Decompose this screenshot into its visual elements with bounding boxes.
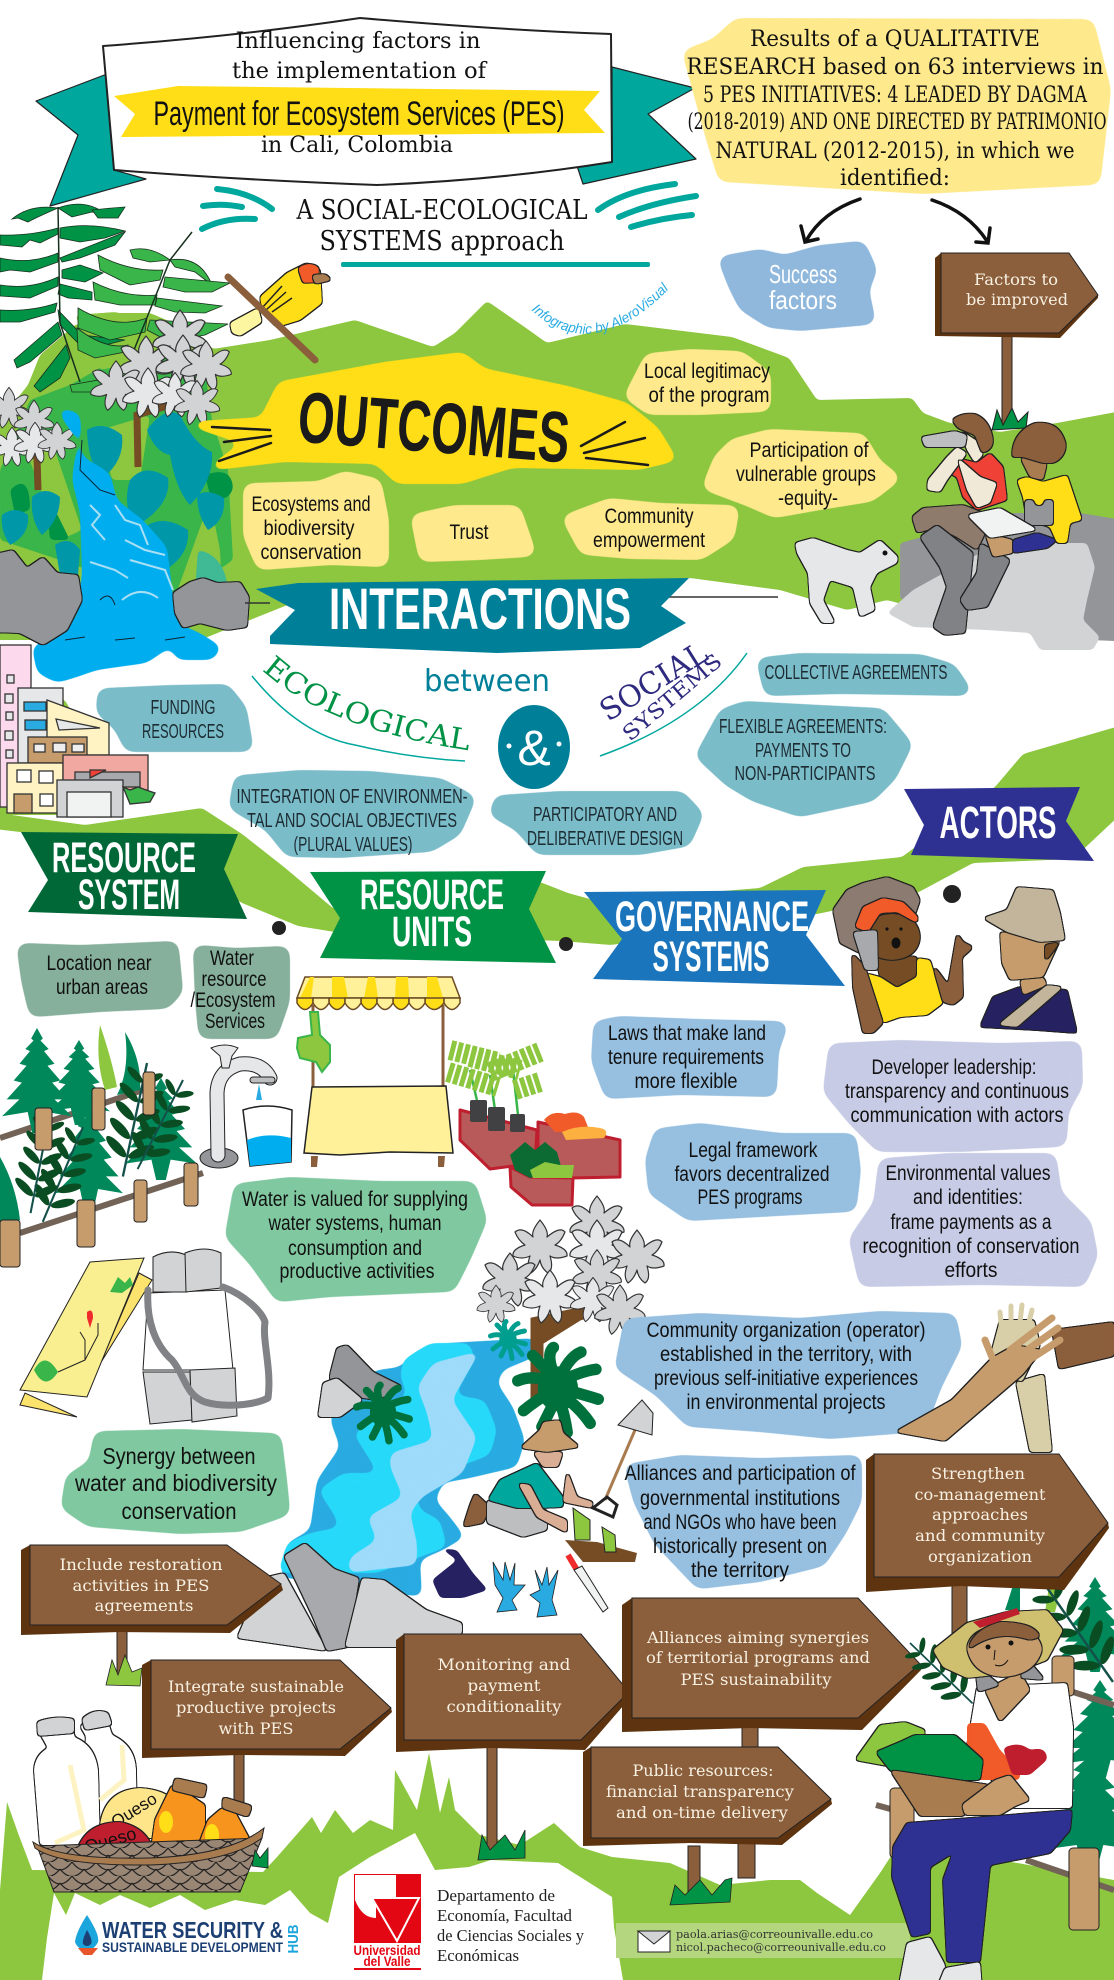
gardener planting (432, 1400, 653, 1617)
sign: include restoration: agreements (94, 1596, 194, 1615)
title text: Payment for Ecosystem Services (PES) (154, 95, 564, 133)
interactions banner: INTERACTIONS (329, 577, 631, 642)
woman on phone (833, 877, 973, 1033)
banner: resource system (21, 832, 247, 919)
banner: resource units (310, 871, 556, 963)
burst lines (212, 422, 648, 465)
hat and face (933, 1608, 1063, 1692)
ampersand badge (498, 705, 570, 789)
research results callout: Results of a QUALITATIVE (750, 27, 1040, 52)
sign: include restoration (21, 1545, 283, 1675)
cheese: Queso (108, 1789, 160, 1832)
interaction: funding resources (103, 691, 246, 745)
success factors tag: Success (769, 259, 837, 289)
outcome: local legitimacy: of the program (648, 384, 770, 407)
title text: the implementation of (232, 59, 488, 84)
sign: factors to be improved: be improved (966, 290, 1068, 309)
interaction: integration of objectives: TAL AND SOCIAL OBJECTIVES (247, 810, 457, 832)
sign: integrate sustainable: with PES (218, 1719, 294, 1738)
subtitle: SYSTEMS approach (320, 226, 564, 257)
outcomes heading: OUTCOMES (295, 378, 573, 479)
interaction: funding resources: FUNDING (150, 697, 216, 719)
resource units: synergy: conservation (122, 1498, 236, 1524)
outcome: participation (710, 436, 892, 511)
seedlings (565, 1508, 637, 1562)
gloves (493, 1562, 558, 1617)
white blossoms (0, 310, 231, 466)
gardener (463, 1420, 593, 1537)
universidad del valle logo: del Valle (364, 1953, 411, 1969)
red cheese (76, 1822, 155, 1857)
actors: developer leadership (830, 1047, 1076, 1145)
pins (272, 885, 961, 951)
water security hub logo (75, 1915, 302, 1955)
sign: include restoration: activities in PES (72, 1576, 210, 1595)
banner: resource system: SYSTEM (78, 871, 180, 919)
water security hub logo: HUB (285, 1924, 302, 1954)
resource units: water valued: consumption and (288, 1237, 422, 1260)
resource system: location: urban areas (56, 976, 148, 999)
outcome: community empowerment: Community (604, 505, 694, 528)
community blob: in environmental projects (686, 1391, 886, 1414)
resource units: water valued: Water is valued for supplying (242, 1188, 468, 1211)
outcome: ecosystems: Ecosystems and (252, 493, 370, 516)
between: between (424, 664, 550, 699)
subtitle: A SOCIAL-ECOLOGICAL (296, 195, 588, 226)
sign: factors to be improved: Factors to (974, 270, 1058, 289)
resource system: water resource (190, 947, 283, 1033)
title text: Influencing factors in (236, 29, 480, 54)
awning (297, 977, 460, 998)
binoculars (143, 1249, 269, 1424)
yellow bird on branch (228, 263, 332, 360)
success factors tag: factors (769, 285, 837, 315)
banner: resource system: RESOURCE (52, 834, 196, 882)
resource system: water resource: resource (202, 968, 266, 991)
outcome: community empowerment: empowerment (593, 529, 705, 552)
interaction: integration of objectives (236, 777, 468, 856)
research results callout (686, 25, 1106, 191)
lower rocks (237, 1543, 462, 1651)
actors: environmental values: efforts (944, 1259, 998, 1282)
department text: Economía, Facultad (437, 1906, 572, 1925)
ecological and social heading (252, 635, 748, 789)
table (304, 1086, 453, 1155)
contact emails: nicol.pacheco@correounivalle.edu.co (676, 1940, 886, 1954)
sign: monitoring: conditionality (446, 1697, 562, 1716)
heart leaves (2, 412, 224, 575)
department text: de Ciencias Sociales y (437, 1926, 584, 1945)
sign: alliances aiming synergies (622, 1598, 921, 1750)
governance: legal framework: PES programs (698, 1186, 802, 1209)
department text: Departamento de (437, 1886, 555, 1905)
lamb (795, 538, 898, 623)
crates (460, 1110, 620, 1178)
teal accent strokes (202, 184, 696, 229)
credit: Infographic by AleroVisual (532, 282, 668, 334)
actors: environmental values (856, 1160, 1091, 1282)
boy with binoculars (912, 414, 1010, 635)
sign: monitoring: payment (468, 1676, 541, 1695)
honey jars (150, 1778, 252, 1857)
outcome: participation: -equity- (778, 487, 838, 510)
icon: envelope (638, 1931, 670, 1952)
title ribbon (36, 18, 696, 206)
shoes (898, 1937, 945, 1980)
trousers (892, 1810, 1072, 1962)
sign: strengthen co-management (866, 1454, 1109, 1638)
bottom grass ground (0, 1753, 1114, 1980)
governance: laws: more flexible (634, 1070, 738, 1093)
resource system: water resource: Services (205, 1010, 265, 1033)
water security hub logo: WATER SECURITY & (102, 1917, 283, 1943)
sign: integrate sustainable: Integrate sustainable (168, 1677, 344, 1696)
department text: Económicas (437, 1946, 519, 1965)
sign: alliances aiming synergies: PES sustainability (680, 1670, 832, 1689)
interaction: flexible agreements: NON-PARTICIPANTS (734, 763, 876, 785)
universidad del valle logo: Universidad (354, 1942, 420, 1958)
upper rocks (318, 1345, 403, 1417)
paper bag (890, 1770, 990, 1816)
produce (855, 1722, 1047, 1816)
interaction: flexible agreements (703, 708, 905, 810)
sign: monitoring: Monitoring and (438, 1655, 570, 1674)
department text (437, 1886, 584, 1965)
banner: governance systems: GOVERNANCE (615, 893, 809, 941)
lime hills background (0, 301, 1114, 945)
actors: environmental values: Environmental values (886, 1162, 1050, 1185)
interactions banner (245, 577, 778, 653)
interaction: collective agreements: COLLECTIVE AGREEMENTS (764, 662, 948, 684)
interaction: flexible agreements: FLEXIBLE AGREEMENTS: (719, 716, 887, 738)
interaction: participatory design: PARTICIPATORY AND (533, 804, 677, 826)
title box (103, 18, 612, 185)
contact emails: paola.arias@correounivalle.edu.co (676, 1927, 873, 1941)
flowering tree (537, 1310, 588, 1400)
farmer plants behind (896, 1560, 1114, 1870)
banner: governance systems: SYSTEMS (652, 933, 770, 981)
ecological and social heading: SYSTEMS (618, 649, 727, 746)
leafy branches (7, 1057, 204, 1231)
interaction: participatory design (497, 798, 696, 850)
conifers (0, 1025, 197, 1225)
machete (568, 1555, 608, 1612)
water tap and glass (200, 1045, 292, 1168)
sign: alliances aiming synergies: of territorial programs and (646, 1648, 870, 1667)
alliances blob: Alliances and participation of (624, 1462, 856, 1485)
subtitle (202, 184, 696, 267)
man in hat (980, 887, 1077, 1033)
resource system: water resource: /Ecosystem (190, 989, 276, 1012)
sign: strengthen co-management: co-management (914, 1485, 1046, 1504)
interaction: collective agreements (764, 660, 963, 689)
sign: public resources: and on-time delivery (616, 1803, 788, 1822)
ribbon tails (36, 67, 696, 206)
banner: resource units: UNITS (392, 908, 472, 956)
hand (962, 1775, 1030, 1815)
children on rock (887, 414, 1114, 650)
actors: developer leadership: communication with actors (850, 1104, 1064, 1127)
resource system: location: Location near (46, 952, 152, 975)
governance: legal framework (652, 1130, 854, 1214)
farmer with vegetables (855, 1608, 1114, 1980)
sign: strengthen co-management: and community (915, 1526, 1045, 1545)
community blob: established in the territory, with (660, 1343, 912, 1366)
sign: strengthen co-management: approaches (932, 1505, 1028, 1524)
alliances blob (624, 1462, 856, 1582)
grass tuft (670, 1878, 732, 1905)
sign: alliances aiming synergies: Alliances aiming synergies (646, 1628, 869, 1647)
saplings (448, 1050, 540, 1115)
universidad del valle logo (354, 1874, 421, 1970)
title text: in Cali, Colombia (261, 133, 453, 158)
sign: public resources: financial transparency (606, 1782, 794, 1801)
outcome: local legitimacy (632, 356, 770, 408)
community blob (622, 1318, 955, 1432)
resource system: water resource: Water (210, 947, 254, 970)
shirt (967, 1683, 1073, 1808)
sign: integrate sustainable (142, 1660, 392, 1807)
map (20, 1258, 152, 1417)
monstera leaves (357, 1347, 598, 1441)
milk bottles (34, 1711, 137, 1845)
grey rocks (0, 550, 249, 645)
mid-green undergrowth (0, 312, 233, 600)
clasped hands (895, 1305, 1114, 1452)
sign: monitoring (396, 1634, 630, 1857)
social systems: SOCIAL (594, 635, 714, 729)
yellow PES banner (114, 86, 605, 137)
ecological: ECOLOGICAL (263, 654, 469, 750)
alliances blob: governmental institutions (640, 1487, 840, 1510)
banner: governance systems (584, 890, 845, 986)
community blob: previous self-initiative experiences (654, 1367, 918, 1390)
research results callout: RESEARCH based on 63 interviews in (686, 55, 1104, 80)
research results callout: NATURAL (2012-2015), in which we (716, 139, 1074, 164)
outcome: participation: Participation of (750, 439, 869, 462)
governance: legal framework: favors decentralized (674, 1163, 830, 1186)
banner: resource units: RESOURCE (360, 871, 504, 919)
trash bag (432, 1548, 488, 1598)
waterfall (32, 407, 222, 683)
fence and trees (0, 1025, 204, 1267)
outcome: trust: Trust (450, 521, 489, 544)
fence behind farmer (876, 1656, 1114, 1930)
trunks (17, 405, 170, 490)
sign: public resources: Public resources: (632, 1761, 774, 1780)
interaction: flexible agreements: PAYMENTS TO (755, 740, 851, 762)
outcome: ecosystems: conservation (260, 541, 362, 564)
resource units: synergy: water and biodiversity (74, 1470, 277, 1496)
governance: legal framework: Legal framework (688, 1139, 818, 1162)
fern frond light (70, 249, 230, 392)
actors: developer leadership: transparency and continuous (845, 1080, 1069, 1103)
sign: strengthen co-management: Strengthen (931, 1464, 1025, 1483)
actors: environmental values: recognition of conservation (862, 1235, 1080, 1258)
research results callout: identified: (840, 166, 950, 191)
outcome: community empowerment (570, 505, 732, 553)
rock (887, 513, 1114, 650)
arrows to factors (801, 199, 990, 243)
resource system: location (24, 948, 176, 1010)
actors: environmental values: frame payments as a (890, 1211, 1052, 1234)
red cheese: Queso (82, 1823, 139, 1857)
market stall (297, 977, 620, 1205)
cheese (100, 1788, 172, 1838)
basket (37, 1838, 262, 1892)
sign: integrate sustainable: productive projects (176, 1698, 336, 1717)
river scene (237, 1196, 664, 1651)
banner: actors (904, 787, 1094, 861)
actors: environmental values: and identities: (913, 1186, 1023, 1209)
city buildings (0, 645, 155, 817)
actors: developer leadership: Developer leadership: (872, 1056, 1036, 1079)
community blob: Community organization (operator) (646, 1319, 926, 1342)
sign: factors to be improved (935, 253, 1098, 430)
outcome: local legitimacy: Local legitimacy (644, 360, 770, 383)
outcome: participation: vulnerable groups (736, 463, 876, 486)
rainforest illustration (0, 204, 249, 683)
outcome: trust (418, 512, 528, 555)
grass tuft (106, 1655, 142, 1686)
boy reading (967, 423, 1082, 557)
resource units: synergy (68, 1436, 283, 1527)
sign: strengthen co-management: organization (928, 1547, 1032, 1566)
resource units: synergy: Synergy between (102, 1443, 256, 1469)
water security hub logo: SUSTAINABLE DEVELOPMENT (102, 1939, 283, 1955)
post for public resources (738, 1838, 755, 1878)
governance: laws (598, 1022, 780, 1093)
alliances blob: the territory (691, 1559, 789, 1582)
outcomes heading (198, 356, 672, 480)
posts (0, 1072, 198, 1267)
grass tuft (478, 1830, 525, 1860)
interaction: integration of objectives: (PLURAL VALUES) (294, 834, 412, 856)
outcome: ecosystems: biodiversity (264, 517, 355, 540)
outcome: ecosystems (250, 478, 382, 564)
resource units: water valued: productive activities (280, 1260, 434, 1283)
shovel (593, 1400, 653, 1517)
sign: public resources (583, 1747, 832, 1901)
river (280, 1338, 537, 1597)
interaction: funding resources: RESOURCES (142, 721, 224, 743)
governance: laws: tenure requirements (608, 1046, 764, 1069)
ampersand badge: & (517, 720, 551, 776)
sign: include restoration: Include restoration (60, 1555, 222, 1574)
alliances blob: historically present on (653, 1535, 827, 1558)
resource units: water valued (232, 1184, 480, 1295)
basket of products (33, 1711, 268, 1892)
resource units: water valued: water systems, human (268, 1212, 442, 1235)
contact emails (638, 1927, 886, 1954)
fern frond dark (0, 204, 125, 392)
interaction: integration of objectives: INTEGRATION OF ENVIRONMEN- (236, 786, 468, 808)
success factors tag (726, 248, 870, 324)
hanging bananas (297, 1012, 330, 1072)
governance: laws: Laws that make land (608, 1022, 766, 1045)
alliances blob: and NGOs who have been (644, 1511, 836, 1534)
title text (154, 29, 564, 158)
interaction: participatory design: DELIBERATIVE DESIGN (527, 828, 683, 850)
